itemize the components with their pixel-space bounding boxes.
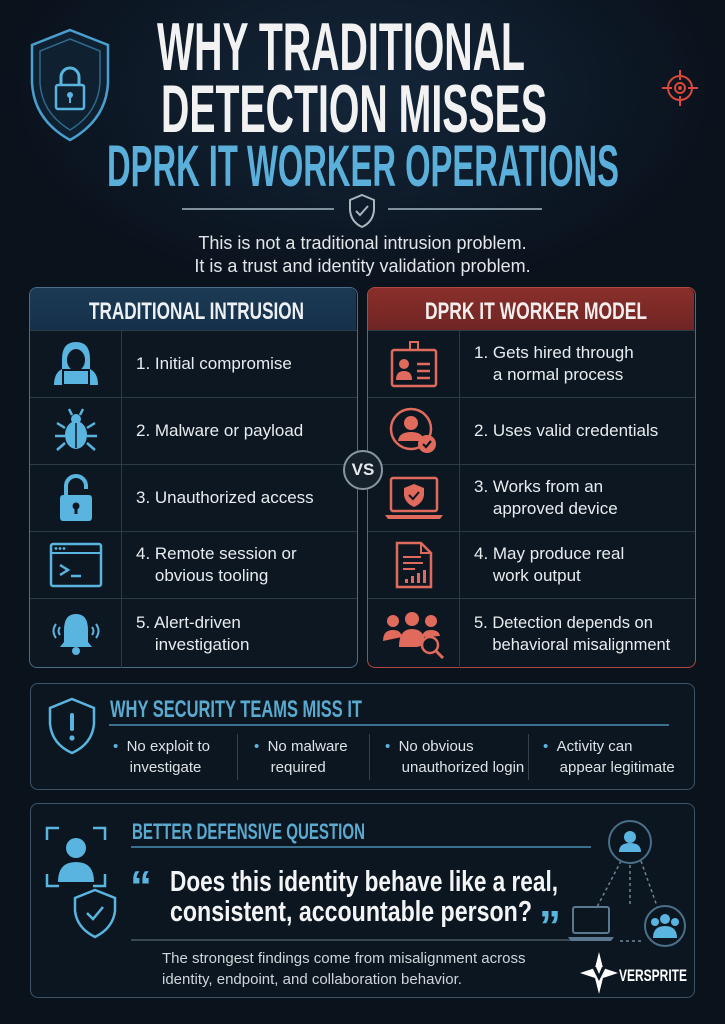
item 2 bbox=[368, 397, 695, 464]
item 2 bbox=[30, 397, 357, 464]
item 1: a normal process bbox=[493, 365, 623, 384]
item 4: 4. May produce real bbox=[474, 544, 624, 563]
bullet list: unauthorized login bbox=[402, 759, 524, 776]
icon: shield lock bbox=[30, 28, 110, 142]
bullet list: investigate bbox=[130, 759, 201, 776]
quote: “ bbox=[130, 862, 152, 911]
bullet list: required bbox=[271, 759, 326, 776]
bullet list: appear legitimate bbox=[560, 759, 675, 776]
icon: shield alert bbox=[48, 698, 96, 754]
item 3 bbox=[368, 464, 695, 531]
item 1 bbox=[30, 330, 357, 397]
bullet list bbox=[113, 734, 675, 780]
item 2: 2. Uses valid credentials bbox=[474, 421, 658, 440]
item 1 bbox=[368, 330, 695, 397]
item 4 bbox=[368, 531, 695, 598]
item 2: 2. Malware or payload bbox=[136, 421, 303, 440]
item 4: obvious tooling bbox=[155, 566, 268, 585]
panel: DPRK IT worker model bbox=[367, 287, 696, 668]
item 4: work output bbox=[493, 566, 581, 585]
network diagram bbox=[568, 820, 686, 947]
bullet list: • No exploit to bbox=[113, 738, 210, 755]
footnote text bbox=[162, 950, 525, 988]
item 3: 3. Works from an bbox=[474, 477, 603, 496]
item 5: 5. Detection depends on bbox=[474, 614, 653, 632]
footnote text: identity, endpoint, and collaboration behavior. bbox=[162, 971, 462, 988]
subtitle: It is a trust and identity validation problem. bbox=[194, 256, 531, 276]
item 5: behavioral misalignment bbox=[492, 636, 670, 654]
panel: traditional intrusion bbox=[29, 287, 358, 668]
item 4 bbox=[30, 531, 357, 598]
bullet list: • Activity can bbox=[543, 738, 632, 755]
panel: why security teams miss it bbox=[30, 683, 695, 790]
item 4: 4. Remote session or bbox=[136, 544, 297, 563]
bullet list: • No obvious bbox=[385, 738, 474, 755]
bullet list: • No malware bbox=[254, 738, 348, 755]
item 3 bbox=[30, 464, 357, 531]
heading: DPRK IT worker model bbox=[368, 288, 694, 330]
panel: better defensive question bbox=[30, 803, 695, 998]
subtitle: This is not a traditional intrusion problem. bbox=[198, 233, 527, 253]
item 1: 1. Initial compromise bbox=[136, 354, 292, 373]
icon: identity scan with shield bbox=[46, 826, 116, 938]
quote bbox=[130, 862, 561, 934]
footnote text: The strongest findings come from misalignment across bbox=[162, 950, 525, 967]
VS badge: VS bbox=[352, 460, 374, 479]
item 5 bbox=[368, 598, 695, 668]
item 3: 3. Unauthorized access bbox=[136, 488, 314, 507]
background glow bbox=[0, 0, 725, 300]
item 5: investigation bbox=[155, 634, 249, 654]
item 5: 5. Alert-driven bbox=[136, 612, 241, 632]
subtitle bbox=[194, 233, 531, 276]
item 3: approved device bbox=[493, 499, 618, 518]
title bbox=[107, 9, 619, 199]
item 5 bbox=[30, 598, 357, 668]
VS badge bbox=[343, 450, 383, 490]
logo: versprite bbox=[580, 952, 687, 994]
heading: traditional intrusion bbox=[30, 288, 356, 330]
icon: target bbox=[662, 70, 698, 106]
item 1: 1. Gets hired through bbox=[474, 343, 634, 362]
divider with shield bbox=[182, 194, 542, 228]
